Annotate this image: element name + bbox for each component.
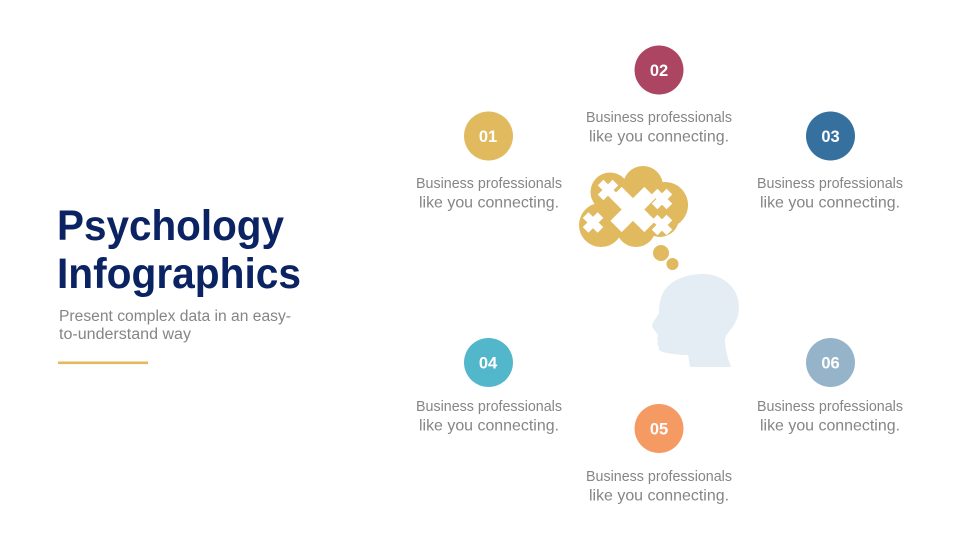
number badge 03 xyxy=(806,112,855,160)
item 06 text: like you connecting. xyxy=(760,418,900,434)
number badge 02: 02 xyxy=(650,62,668,80)
item 04 text: like you connecting. xyxy=(419,418,559,434)
item 01 xyxy=(416,112,562,212)
item 02 text xyxy=(586,109,732,146)
title xyxy=(57,202,301,298)
item 01 text: Business professionals xyxy=(416,175,562,192)
number badge 05: 05 xyxy=(650,420,668,438)
item 03 xyxy=(757,112,903,212)
item 03 text: Business professionals xyxy=(757,175,903,192)
accent underline xyxy=(58,362,148,364)
item 01 text xyxy=(416,175,562,212)
item 02 text: Business professionals xyxy=(586,109,732,126)
icon: thought cloud with crosses xyxy=(578,166,688,270)
number badge 04 xyxy=(464,338,513,387)
item 04 text xyxy=(416,398,562,434)
number badge 02 xyxy=(634,46,684,94)
number badge 06: 06 xyxy=(821,354,840,372)
item 06 xyxy=(757,338,903,434)
subtitle text xyxy=(59,308,291,343)
title: Infographics xyxy=(57,250,301,298)
subtitle text: to-understand way xyxy=(59,326,191,343)
item 05 text: Business professionals xyxy=(586,468,732,485)
number badge 01: 01 xyxy=(479,128,497,146)
item 02 xyxy=(586,46,732,146)
item 03 text: like you connecting. xyxy=(760,194,900,212)
number badge 05 xyxy=(634,404,684,453)
item 02 text: like you connecting. xyxy=(589,128,729,146)
title: Psychology xyxy=(57,202,284,250)
item 03 text xyxy=(757,175,903,212)
item 06 text: Business professionals xyxy=(757,398,903,415)
item 05 text xyxy=(586,468,732,504)
number badge 03: 03 xyxy=(821,128,840,146)
number badge 01 xyxy=(464,112,513,160)
subtitle text: Present complex data in an easy- xyxy=(59,308,291,325)
item 04 xyxy=(416,338,562,434)
item 05 text: like you connecting. xyxy=(589,488,729,504)
number badge 06 xyxy=(806,338,855,387)
item 01 text: like you connecting. xyxy=(419,194,559,212)
item 06 text xyxy=(757,398,903,434)
item 04 text: Business professionals xyxy=(416,398,562,415)
icon: head silhouette xyxy=(652,274,739,367)
item 05 xyxy=(586,404,732,504)
number badge 04: 04 xyxy=(479,354,498,372)
